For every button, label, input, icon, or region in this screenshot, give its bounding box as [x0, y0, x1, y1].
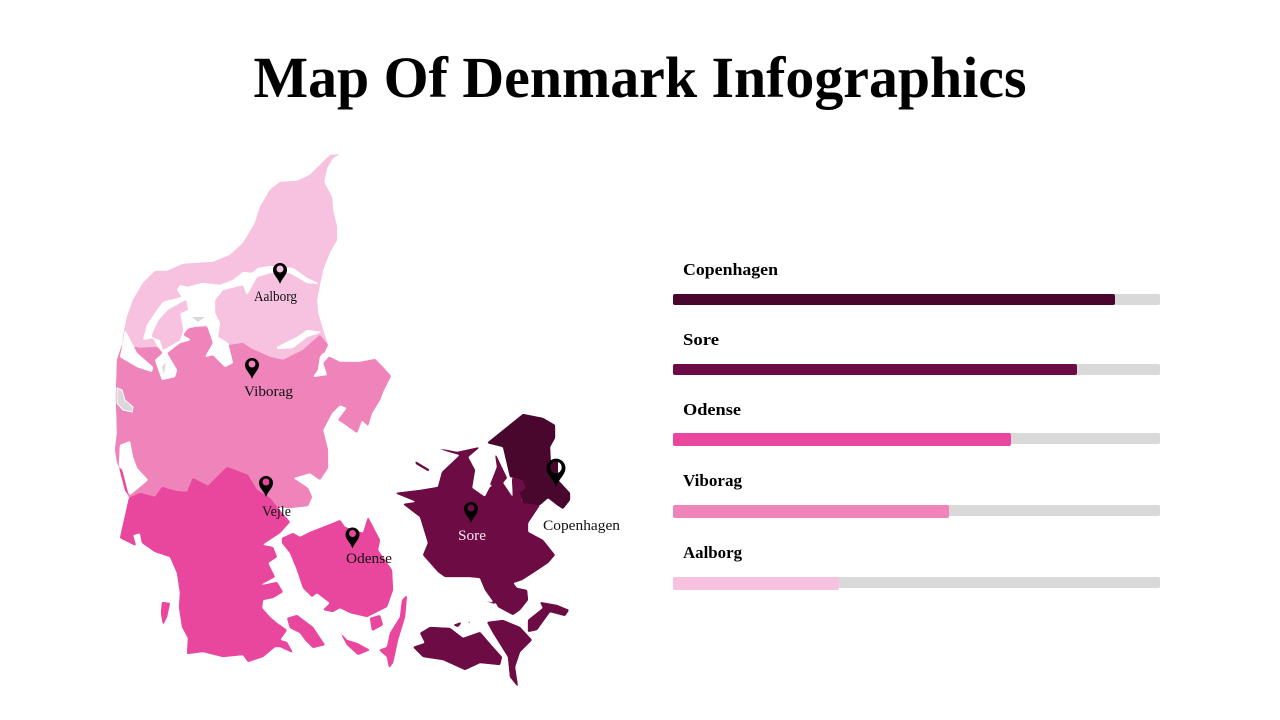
- bar row: Viborag: [673, 471, 1160, 518]
- label: Aalborg: Aalborg: [254, 289, 297, 305]
- label: Sore: Sore: [458, 528, 486, 544]
- bar row: Odense: Odense: [683, 400, 741, 419]
- pin: Aalborg: [273, 263, 287, 284]
- fjord: Randers: [313, 353, 330, 377]
- region: Vejle: [119, 467, 325, 662]
- pin: Vejle: [259, 476, 273, 497]
- region: Aalborg: [122, 154, 340, 370]
- label: Vejle: Vejle: [262, 504, 291, 520]
- bar row: Aalborg: [673, 543, 1160, 590]
- title: Map Of Denmark Infographics: [254, 45, 1026, 110]
- label: Odense: Odense: [346, 551, 392, 567]
- bar row: Odense: [673, 400, 1160, 446]
- area: gray islands: [117, 317, 205, 412]
- bar row: Sore: [673, 330, 1160, 375]
- island: Mors peninsula: [152, 300, 188, 350]
- region: Odense: [282, 517, 407, 668]
- label: Viborag: Viborag: [244, 384, 293, 400]
- bar row: Copenhagen: [673, 260, 1160, 305]
- fjord: Mariager: [277, 330, 322, 349]
- bar row: Copenhagen: Copenhagen: [683, 260, 778, 279]
- map of Denmark: [115, 154, 570, 687]
- pin: Odense: [346, 528, 360, 548]
- pin: Viborag: [245, 358, 259, 379]
- fjord: Limfjord: [143, 266, 320, 380]
- bar row: Sore: Sore: [683, 330, 719, 349]
- region: Copenhagen: [487, 414, 570, 509]
- pin: Copenhagen: [547, 459, 565, 487]
- pin: Sore: [464, 502, 478, 523]
- region: Viborag: [115, 327, 391, 508]
- bar row: Viborag: Viborag: [683, 471, 743, 490]
- bar row: Aalborg: Aalborg: [683, 543, 743, 562]
- bar chart: [673, 260, 1160, 590]
- fjord: Ringkobing: [119, 441, 148, 495]
- region: Sore: [395, 447, 569, 687]
- fjord: west inlet: [120, 330, 153, 372]
- label: Copenhagen: Copenhagen: [543, 518, 621, 534]
